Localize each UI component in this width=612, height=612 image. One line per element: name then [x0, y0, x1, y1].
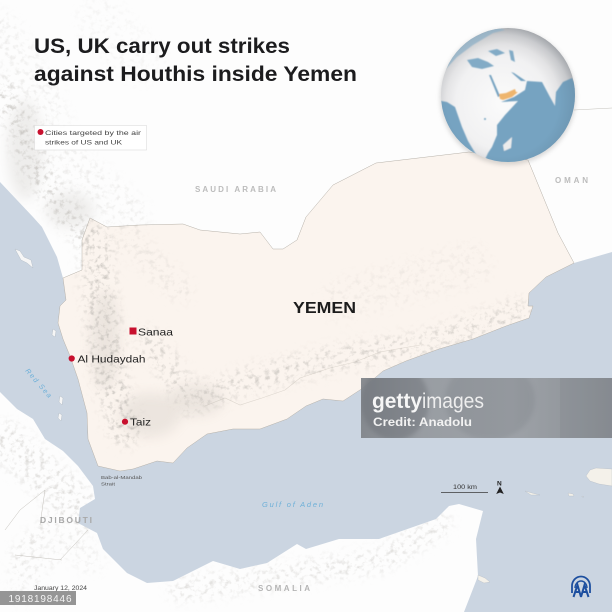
city: Al Hudaydah: Al Hudaydah — [78, 354, 146, 366]
Red Sea islands — [15, 249, 63, 421]
label: Djibouti: DJIBOUTI — [40, 515, 92, 525]
title: US, UK carry out strikes — [34, 35, 290, 58]
scale bar: 100 km — [453, 485, 477, 491]
label: Oman: OMAN — [555, 176, 588, 185]
watermark: Getty Images: images — [422, 390, 484, 413]
legend: Cities targeted by the air — [45, 130, 142, 137]
watermark: Getty Images — [361, 378, 612, 438]
Yemen territory — [58, 152, 574, 471]
globe: Caspian Sea — [509, 50, 515, 62]
city: Taiz: Taiz — [130, 416, 151, 428]
label: Yemen: YEMEN — [293, 300, 356, 317]
north arrow — [496, 480, 504, 494]
watermark: Getty Images: getty — [372, 390, 422, 413]
globe: Yemen highlight — [499, 89, 518, 100]
globe: Madagascar — [503, 137, 512, 151]
globe: inland lake — [484, 118, 486, 120]
label: Red Sea: Red Sea — [23, 368, 52, 400]
globe: Atlantic Ocean — [441, 100, 476, 154]
locator globe — [436, 25, 582, 170]
Socotra and nearby islands — [478, 468, 612, 583]
legend — [34, 126, 146, 150]
globe: Mediterranean — [467, 58, 494, 69]
logo: AA — [572, 576, 590, 597]
globe: Indian Ocean — [485, 78, 575, 162]
label: Gulf of Aden: Gulf of Aden — [262, 500, 323, 509]
label: Saudi Arabia: SAUDI ARABIA — [195, 185, 276, 194]
city: Sanaa: Sanaa — [138, 326, 173, 338]
title — [34, 35, 357, 86]
north arrow: N — [497, 480, 502, 488]
label: Somalia: SOMALIA — [258, 584, 310, 593]
label: Bab-al-Mandab Strait — [101, 475, 142, 488]
city: Sanaa — [130, 326, 173, 338]
globe: Black Sea — [488, 49, 505, 56]
image id tag: 1918198446 — [8, 594, 72, 605]
globe: Persian Gulf — [511, 72, 526, 81]
title: against Houthis inside Yemen — [34, 63, 357, 86]
Yemen-Oman and regional borders — [5, 108, 612, 560]
city: Taiz — [122, 416, 151, 428]
scale bar — [441, 485, 488, 493]
watermark: Getty Images: Credit: Anadolu — [373, 415, 472, 429]
label: Bab-al-Mandab Strait: Strait — [101, 482, 116, 488]
globe: North Atlantic — [446, 28, 504, 70]
label: Bab-al-Mandab Strait: Bab-al-Mandab — [101, 475, 142, 481]
sea — [0, 182, 612, 612]
image id tag — [0, 591, 76, 605]
legend: strikes of US and UK — [45, 140, 123, 146]
date: January 12, 2024 — [34, 586, 88, 592]
globe: Red Sea — [489, 75, 500, 97]
